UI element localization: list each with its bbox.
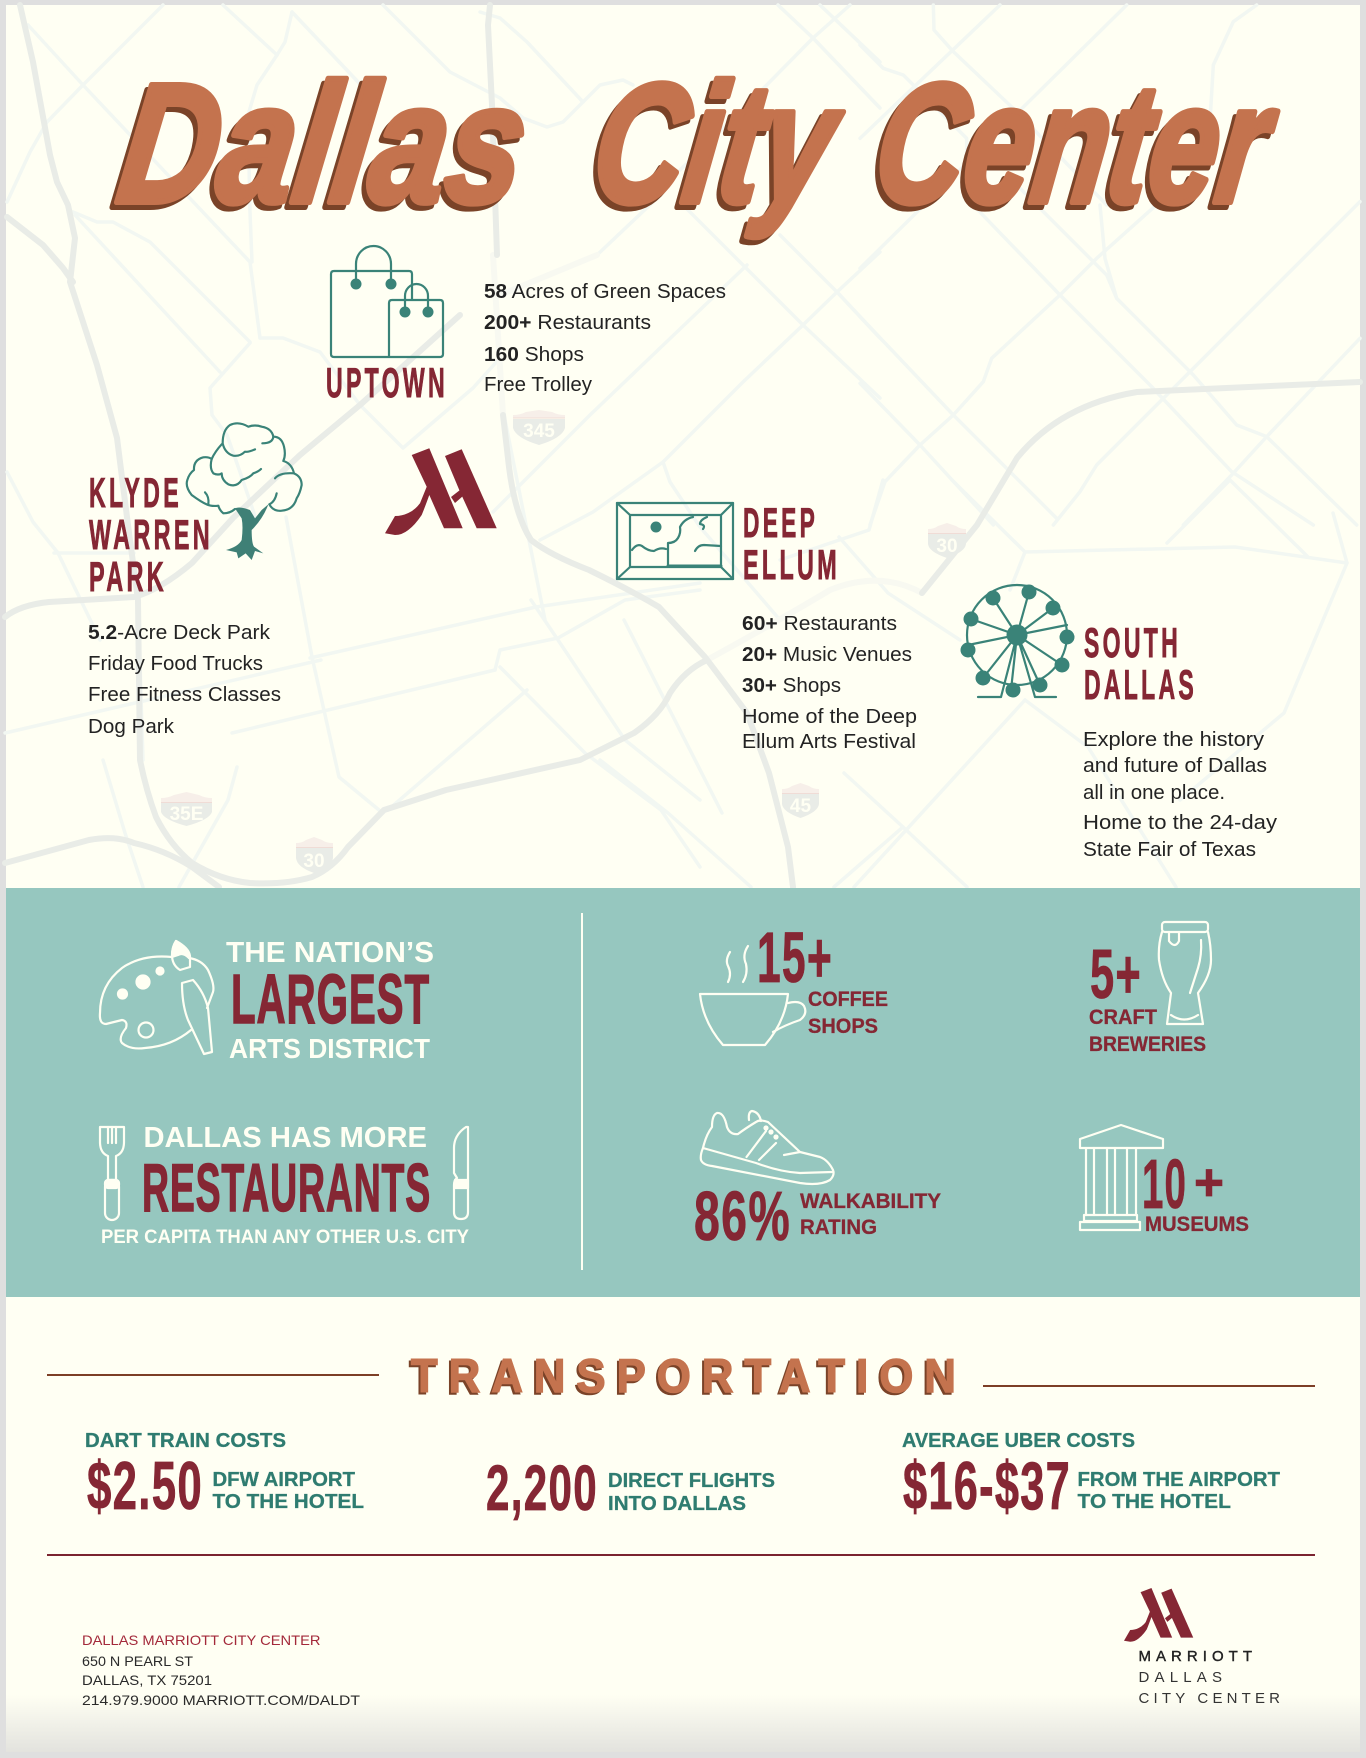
icon: museum: [1080, 1125, 1163, 1230]
stat: largest arts district: LARGEST: [231, 960, 430, 1038]
highway shield 30 east: [928, 523, 966, 558]
heading: Deep Ellum: DEEP: [743, 499, 818, 546]
panel: South Dallas: [960, 584, 1277, 861]
text: Deep Ellum facts: [742, 613, 917, 753]
stat: DART train costs: [85, 1430, 364, 1524]
text: South Dallas description: and future of Dallas: [1083, 755, 1267, 777]
stat: walkability rating: [694, 1177, 941, 1255]
stat: museums: 10: [1142, 1145, 1187, 1223]
text: park facts: Friday Food Trucks: [88, 653, 263, 675]
highway shield 345: 345: [523, 421, 555, 442]
stat: DART train costs: TO THE HOTEL: [212, 1491, 364, 1513]
heading: Klyde Warren Park: WARREN: [89, 511, 213, 558]
footer Marriott logo: DALLAS: [1138, 1669, 1222, 1686]
panel: Klyde Warren Park: [88, 423, 302, 738]
heading: Klyde Warren Park: [89, 469, 213, 600]
heading: Klyde Warren Park: PARK: [89, 553, 167, 600]
text: Uptown facts: 58 Acres of Green Spaces: [484, 281, 726, 303]
heading: Klyde Warren Park: KLYDE: [89, 469, 182, 516]
text: Deep Ellum facts: 20+ Music Venues: [742, 644, 912, 666]
stat: DART train costs: $2.50: [87, 1448, 203, 1524]
title: Dallas City Center: Dallas: [104, 54, 534, 244]
heading: Transportation: TRANSPORTATION: [411, 1349, 967, 1402]
stat: average Uber costs: AVERAGE UBER COSTS: [902, 1430, 1135, 1452]
stat: average Uber costs: $16-$37: [903, 1448, 1071, 1524]
footer Marriott logo: CITY CENTER: [1138, 1690, 1280, 1707]
panel: Deep Ellum: [617, 499, 917, 753]
stat: largest arts district: [226, 937, 434, 1064]
text: Deep Ellum facts: Home of the Deep: [742, 706, 917, 728]
text: Uptown facts: 200+ Restaurants: [484, 312, 651, 334]
text: park facts: Dog Park: [88, 716, 175, 738]
stat: coffee shops: [757, 919, 888, 1038]
panel: Uptown: [326, 246, 726, 406]
highway shield 30 west: 30: [303, 851, 325, 872]
text: Deep Ellum facts: 30+ Shops: [742, 675, 841, 697]
title: Dallas City Center: Dallas: [109, 49, 539, 239]
stat: largest arts district: ARTS DISTRICT: [229, 1033, 430, 1064]
stat: museums: MUSEUMS: [1145, 1213, 1249, 1236]
icon: shopping bags: [331, 246, 443, 357]
footer address: [82, 1632, 361, 1708]
text: Uptown facts: Free Trolley: [484, 374, 592, 396]
text: Uptown facts: [484, 281, 726, 396]
heading: Uptown: UPTOWN: [326, 359, 448, 406]
text: South Dallas description: all in one place.: [1083, 782, 1225, 804]
stat: craft breweries: CRAFT: [1089, 1006, 1157, 1029]
icon: ferris wheel: [960, 584, 1074, 698]
text: park facts: 5.2-Acre Deck Park: [88, 622, 271, 644]
stat: direct flights: 2,200: [486, 1452, 598, 1524]
highway shield 30 west: [296, 837, 333, 873]
text: South Dallas description: [1083, 729, 1277, 861]
stat: most restaurants per capita: PER CAPITA THAN ANY OTHER U.S. CITY: [101, 1226, 469, 1248]
stat: coffee shops: COFFEE: [808, 988, 888, 1011]
panel: teal statistics band: [6, 888, 1360, 1297]
highway shield 345: [513, 410, 565, 445]
stat: average Uber costs: [902, 1430, 1280, 1524]
icon: framed painting: [617, 503, 733, 579]
stat: craft breweries: 5+: [1090, 935, 1142, 1013]
highway shield 45: 45: [790, 796, 811, 817]
footer address: 650 N PEARL ST: [82, 1653, 193, 1669]
panel: transportation: [47, 1349, 1315, 1556]
title: Dallas City Center: [104, 49, 1288, 244]
stat: direct flights: INTO DALLAS: [608, 1493, 746, 1515]
highway shield 45: [782, 783, 819, 818]
stat: coffee shops: 15+: [757, 919, 833, 998]
text: park facts: Free Fitness Classes: [88, 684, 281, 706]
text: South Dallas description: Home to the 24-day: [1083, 812, 1277, 834]
highway shield 35E: [161, 792, 212, 826]
map background: [5, 5, 1360, 887]
stat: walkability rating: 86%: [694, 1177, 791, 1255]
heading: South Dallas: [1084, 619, 1197, 708]
stat: most restaurants per capita: RESTAURANTS: [142, 1150, 431, 1226]
footer Marriott logo: MARRIOTT: [1138, 1648, 1252, 1665]
footer bottom fade: [6, 1695, 1360, 1752]
footer Marriott logo: [1124, 1588, 1280, 1707]
title: Dallas City Center: City: [583, 49, 853, 239]
stat: museums: [1142, 1145, 1249, 1236]
title: Dallas City Center: City: [578, 54, 849, 244]
stat: largest arts district: THE NATION’S: [226, 937, 434, 969]
stat: direct flights: [486, 1452, 775, 1524]
stat: average Uber costs: FROM THE AIRPORT: [1078, 1469, 1280, 1491]
text: Uptown facts: 160 Shops: [484, 344, 584, 366]
heading: Deep Ellum: [743, 499, 840, 588]
icon: sneaker: [701, 1111, 834, 1184]
footer address: DALLAS, TX 75201: [82, 1672, 212, 1688]
logo: Marriott M: [385, 448, 497, 535]
icon: fork: [100, 1127, 124, 1220]
text: Deep Ellum facts: Ellum Arts Festival: [742, 731, 916, 753]
text: Deep Ellum facts: 60+ Restaurants: [742, 613, 897, 635]
stat: DART train costs: DFW AIRPORT: [212, 1469, 355, 1491]
highway shield 30 east: 30: [936, 536, 958, 557]
icon: beer glass: [1159, 922, 1211, 1024]
footer address: 214.979.9000 MARRIOTT.COM/DALDT: [82, 1692, 361, 1708]
text: park facts: [88, 622, 281, 738]
heading: Deep Ellum: ELLUM: [743, 541, 840, 588]
stat: most restaurants per capita: DALLAS HAS MORE: [144, 1122, 427, 1154]
heading: South Dallas: DALLAS: [1084, 661, 1197, 708]
stat: most restaurants per capita: [101, 1122, 469, 1248]
icon: paint palette: [100, 941, 213, 1054]
icon: tree: [187, 423, 302, 560]
stat: walkability rating: RATING: [800, 1216, 877, 1239]
icon: coffee cup: [700, 946, 805, 1045]
stat: craft breweries: BREWERIES: [1089, 1033, 1206, 1056]
highway shield 35E: 35E: [170, 804, 203, 825]
stat: DART train costs: DART TRAIN COSTS: [85, 1430, 286, 1452]
stat: coffee shops: SHOPS: [808, 1015, 878, 1038]
stat: average Uber costs: TO THE HOTEL: [1078, 1491, 1231, 1513]
footer address: DALLAS MARRIOTT CITY CENTER: [82, 1632, 320, 1648]
stat: direct flights: DIRECT FLIGHTS: [608, 1470, 775, 1492]
icon: knife: [454, 1127, 468, 1219]
heading: Transportation: TRANSPORTATION: [409, 1351, 965, 1404]
heading: South Dallas: SOUTH: [1084, 619, 1181, 666]
text: South Dallas description: State Fair of Texas: [1083, 839, 1256, 861]
text: South Dallas description: Explore the history: [1083, 729, 1264, 751]
stat: museums: +: [1194, 1154, 1226, 1212]
stat: walkability rating: WALKABILITY: [800, 1190, 941, 1213]
stat: craft breweries: [1089, 935, 1206, 1056]
